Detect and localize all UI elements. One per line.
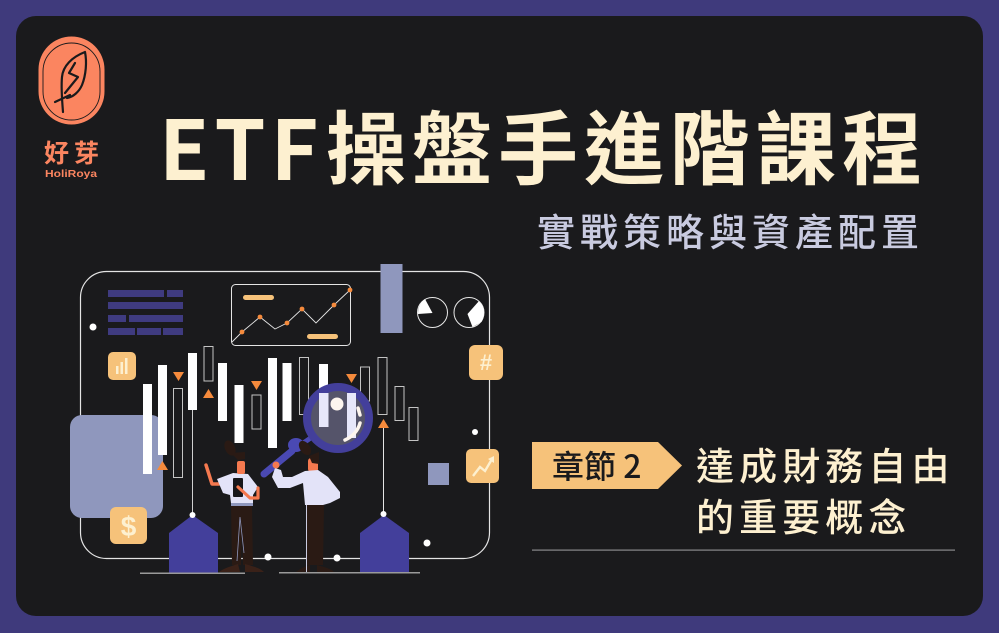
- logo latin name: HoliRoya: [45, 168, 97, 180]
- stems: [192, 410, 194, 516]
- chapter badge: [532, 442, 682, 489]
- person: woman with phone: [206, 439, 264, 572]
- logo chinese name: 好芽: [44, 134, 99, 170]
- icon: bar chart tile: [108, 352, 136, 380]
- illustration: market analysis: [70, 264, 503, 574]
- tall lavender block: [380, 264, 402, 333]
- title: ETF: [159, 85, 324, 204]
- text block lines: [108, 290, 183, 335]
- chapter title line 1: 達成財務自由: [696, 436, 955, 491]
- icon: dollar tile: [110, 507, 147, 544]
- blue house blocks: [169, 515, 409, 573]
- candlestick chart: [143, 346, 418, 516]
- orange markers: [157, 372, 389, 470]
- chapter title line 2: 的重要概念: [696, 487, 912, 542]
- large lavender panel: [70, 415, 163, 518]
- divider line: [532, 550, 955, 551]
- icon: trend tile: [466, 449, 499, 483]
- chapter badge: 章節 2: [552, 442, 641, 488]
- person: man with magnifier: [272, 439, 340, 572]
- logo: HoliRoya: [38, 36, 104, 180]
- small slate square: [428, 463, 449, 485]
- subtitle: 實戰策略與資產配置: [537, 202, 924, 257]
- icon: hash tile: [469, 345, 503, 380]
- title: 操盤手進階課程: [326, 86, 928, 202]
- icon: dollar tile: $: [121, 511, 137, 542]
- icon: feather badge: [38, 36, 104, 124]
- magnifying glass: [264, 387, 369, 474]
- line chart card: [232, 284, 352, 346]
- dots on stems: [190, 511, 386, 518]
- pie charts: [418, 298, 484, 328]
- icon: hash tile: #: [480, 350, 492, 375]
- ground lines: [140, 572, 420, 574]
- dashboard frame: [80, 272, 490, 558]
- decorative dots: [90, 324, 478, 562]
